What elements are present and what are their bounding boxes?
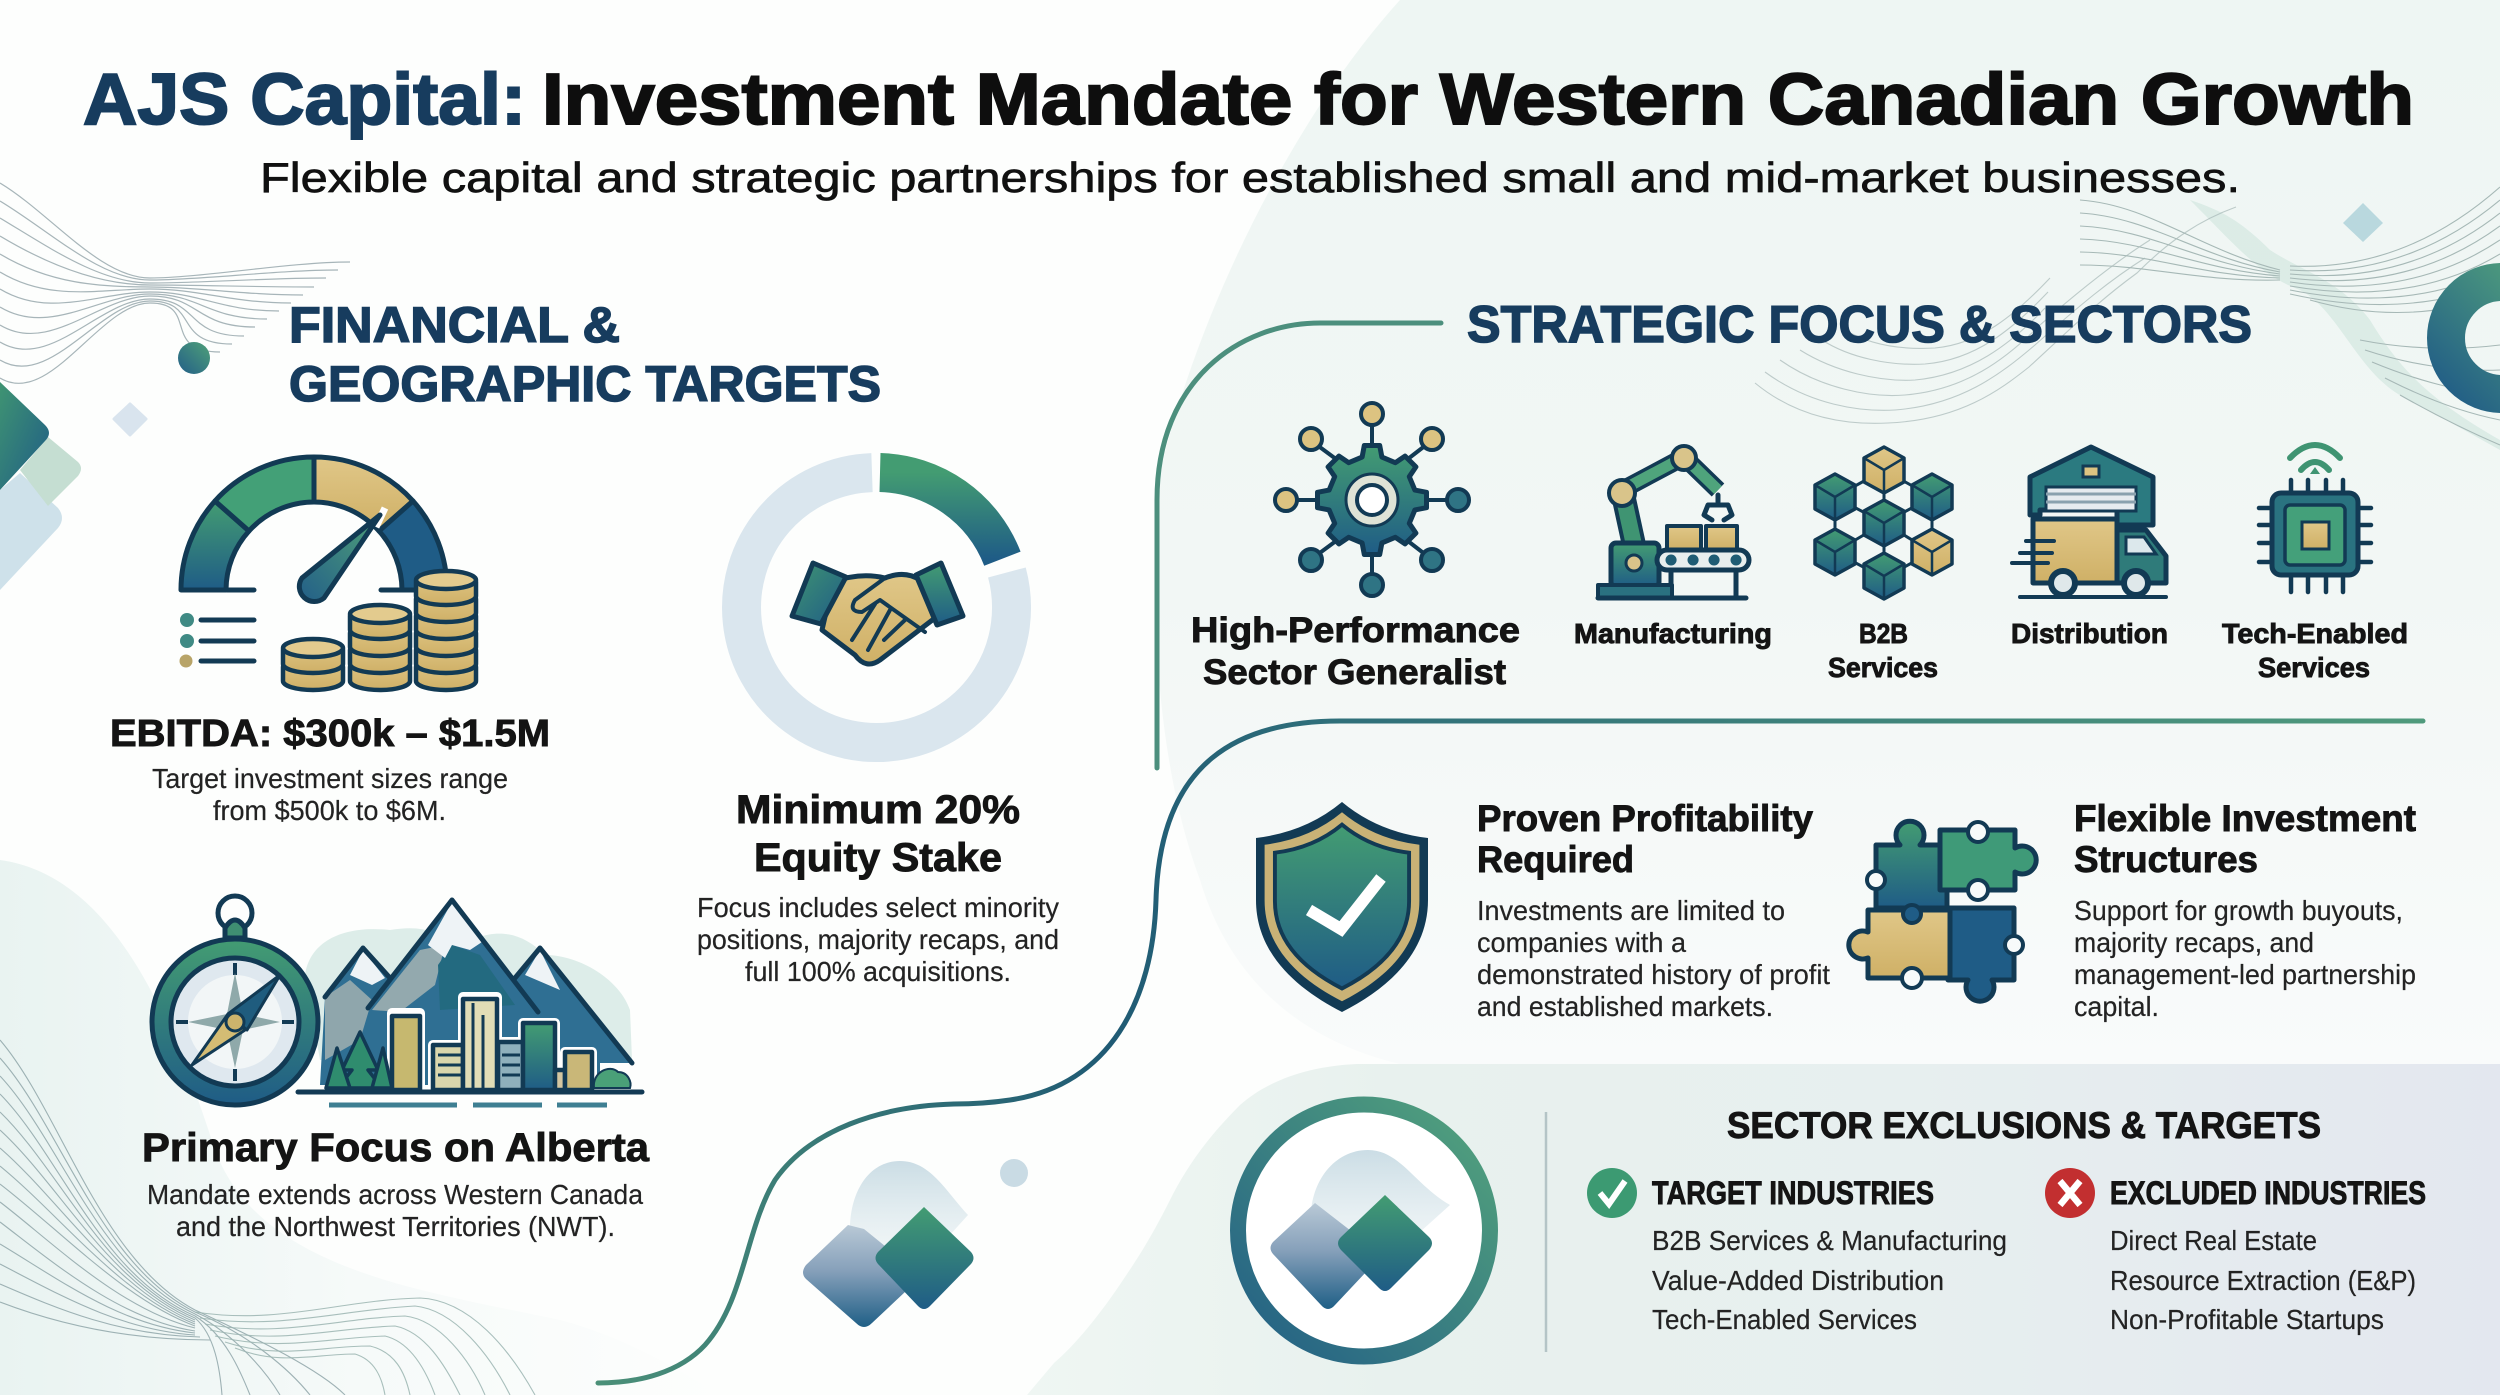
- icon: puzzle pieces: [1849, 821, 2036, 1001]
- subtitle: Flexible capital and strategic partnerships for established small and mid-market businesses.: [260, 154, 2240, 201]
- heading: sector exclusions and targets: SECTOR EXCLUSIONS & TARGETS: [1727, 1105, 2321, 1146]
- label: distribution: Distribution: [2011, 618, 2168, 649]
- decoration: bottom-left wave lines: [0, 1040, 345, 1395]
- items: excluded list: Resource Extraction (E&P): [2110, 1265, 2416, 1296]
- items: target list: Value-Added Distribution: [1652, 1265, 1944, 1296]
- text: proven profitability required: Proven Profitability: [1477, 798, 1813, 839]
- label: excluded industries: EXCLUDED INDUSTRIES: [2110, 1175, 2426, 1211]
- text: proven profitability required: demonstrated history of profit: [1477, 959, 1830, 990]
- icon: red cross: [2045, 1168, 2095, 1218]
- icon: shield with check: [1256, 802, 1428, 1012]
- items: excluded list: Non-Profitable Startups: [2110, 1304, 2384, 1335]
- text: primary focus on Alberta: Mandate extends across Western Canada: [147, 1179, 643, 1210]
- panel: strategic focus and sectors: [1191, 296, 2408, 692]
- icon: green check: [1587, 1168, 1637, 1218]
- decoration: top-right ring and diamond: [2343, 203, 2500, 394]
- label: high-performance sector generalist: High-Performance: [1191, 611, 1520, 650]
- heading: financial and geographic targets: FINANCIAL &: [289, 297, 620, 353]
- divider: [1545, 1112, 1547, 1352]
- label: B2B services: Services: [1828, 652, 1938, 683]
- label: target industries: TARGET INDUSTRIES: [1652, 1175, 1934, 1211]
- items: excluded list: [2110, 1225, 2416, 1335]
- decoration: top-left wave lines: [0, 183, 350, 383]
- text: proven profitability required: Investments are limited to: [1477, 895, 1785, 926]
- icon: gauge and coins: [180, 457, 476, 690]
- icon: robot arm manufacturing: [1598, 446, 1749, 598]
- text: minimum equity stake: Equity Stake: [754, 836, 1002, 880]
- label: B2B services: B2B: [1859, 618, 1908, 649]
- arrow: connector line above strategic focus: [1157, 323, 1441, 768]
- panel: financial and geographic targets: [110, 297, 1059, 1242]
- title: Investment Mandate for Western Canadian Growth: [542, 60, 2414, 140]
- items: target list: B2B Services & Manufacturing: [1652, 1225, 2007, 1256]
- arrow: flowing connector line: [598, 721, 2423, 1383]
- text: minimum equity stake: Focus includes select minority: [697, 892, 1059, 923]
- items: target list: Tech-Enabled Services: [1652, 1304, 1917, 1335]
- label: tech-enabled services: Tech-Enabled: [2222, 618, 2408, 649]
- list: excluded industries: [2045, 1168, 2426, 1335]
- icon: large logo in ring: [1238, 1104, 1490, 1356]
- items: excluded list: Direct Real Estate: [2110, 1225, 2317, 1256]
- text: proven profitability required: [1477, 798, 1830, 1022]
- text: EBITDA target: [110, 713, 550, 826]
- label: high-performance sector generalist: [1191, 611, 1520, 692]
- text: flexible investment structures: [2074, 798, 2416, 1022]
- text: flexible investment structures: Structures: [2074, 839, 2258, 880]
- panel: investment criteria: [1256, 798, 2416, 1022]
- icon: small logo mark: [803, 1159, 1028, 1327]
- icon: gear network: [1275, 403, 1469, 596]
- items: target list: [1652, 1225, 2007, 1335]
- text: flexible investment structures: Support for growth buyouts,: [2074, 895, 2403, 926]
- text: flexible investment structures: Flexible Investment: [2074, 798, 2416, 839]
- decoration: top-right wave lines: [1755, 187, 2500, 450]
- text: EBITDA target: Target investment sizes range: [152, 763, 508, 794]
- buildings: [392, 997, 592, 1090]
- text: flexible investment structures: capital.: [2074, 991, 2159, 1022]
- title: AJS Capital:: [83, 60, 526, 140]
- text: primary focus on Alberta: Primary Focus on Alberta: [142, 1126, 650, 1170]
- icon: handshake: [792, 563, 963, 664]
- label: manufacturing: Manufacturing: [1574, 618, 1772, 649]
- icon: compass and mountain city: [152, 896, 642, 1105]
- icon: chip tech-enabled: [2259, 445, 2371, 592]
- text: primary focus on Alberta: and the Northwest Territories (NWT).: [176, 1211, 615, 1242]
- text: proven profitability required: Required: [1477, 839, 1634, 880]
- text: EBITDA target: from $500k to $6M.: [213, 795, 446, 826]
- text: proven profitability required: companies with a: [1477, 927, 1686, 958]
- label: tech-enabled services: Services: [2258, 652, 2370, 683]
- list: target industries: [1587, 1168, 2007, 1335]
- text: minimum equity stake: [697, 788, 1059, 987]
- text: minimum equity stake: positions, majority recaps, and: [697, 924, 1059, 955]
- text: flexible investment structures: management-led partnership: [2074, 959, 2416, 990]
- heading: strategic focus and sectors: STRATEGIC FOCUS & SECTORS: [1467, 296, 2252, 354]
- label: B2B services: [1828, 618, 1938, 683]
- trees: [326, 1032, 392, 1088]
- heading: financial and geographic targets: [289, 297, 881, 412]
- text: minimum equity stake: full 100% acquisitions.: [745, 956, 1011, 987]
- decoration: top-left accent shapes: [0, 342, 210, 590]
- icon: warehouse and truck distribution: [2012, 447, 2166, 597]
- text: proven profitability required: and established markets.: [1477, 991, 1773, 1022]
- panel: sector exclusions and targets: [1027, 1064, 2500, 1395]
- text: minimum equity stake: Minimum 20%: [736, 788, 1020, 832]
- text: primary focus on Alberta: [142, 1126, 650, 1242]
- compass: [218, 896, 252, 930]
- chart: equity donut with handshake: [742, 472, 1012, 743]
- label: high-performance sector generalist: Sector Generalist: [1203, 653, 1506, 692]
- label: tech-enabled services: [2222, 618, 2408, 683]
- text: flexible investment structures: majority recaps, and: [2074, 927, 2314, 958]
- icon: cube network B2B services: [1815, 447, 1952, 599]
- heading: financial and geographic targets: GEOGRAPHIC TARGETS: [289, 356, 881, 412]
- text: EBITDA target: EBITDA: $300k – $1.5M: [110, 713, 550, 755]
